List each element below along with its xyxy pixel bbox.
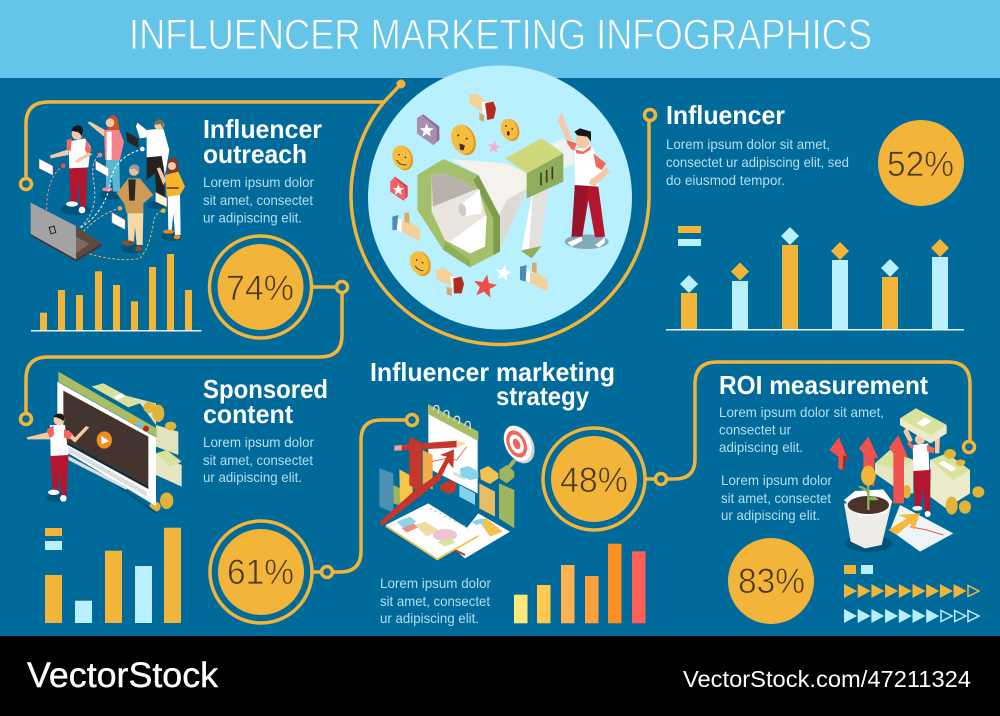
money and coins [92,383,182,512]
title: INFLUENCER MARKETING INFOGRAPHICS [129,11,872,59]
bar chart [45,528,181,623]
text block: Lorem ipsum dolor sit amet, [719,404,884,420]
text block: sit amet, consectet [380,593,490,609]
rating badges [390,114,439,201]
bar chart [31,254,202,332]
text block: consectet ur adipiscing elit, sed [666,154,849,170]
red arrows [829,435,908,503]
text block: sit amet, consectet [721,490,831,506]
arrow meter: orange [844,584,979,598]
notebook [386,503,478,560]
heading: ROI measurement: ROI measurement [719,370,928,400]
laptop [31,203,102,261]
heading: strategy [370,357,615,411]
heading: influencer: Influencer [666,100,785,130]
envelopes [39,159,167,229]
text block: ur adipiscing elit. [203,469,302,485]
percentage badge 61%: 61% [227,553,294,592]
percentage badge 74% [210,236,312,338]
text block: sit amet, consectet [203,452,313,468]
header band [0,0,1000,78]
text block [721,472,832,523]
chart legend [678,226,701,246]
text block: Lorem ipsum dolor [203,434,314,450]
megaphone [417,138,573,267]
text block [380,575,491,626]
footer watermark band: VectorStock [27,656,219,695]
man red and white [50,125,93,213]
chart legend [844,565,873,574]
text block: sit amet, consectet [203,192,313,208]
text block [203,434,314,485]
text block: Lorem ipsum dolor [380,575,491,591]
illustration: people and laptop [31,115,185,261]
footer watermark band: VectorStock.com/47211324 [683,666,971,692]
heading: strategy: strategy [496,381,589,411]
text block: ur adipiscing elit. [203,210,302,226]
bar chart [514,544,646,623]
percentage badge 52%: 52% [887,145,954,184]
text block [203,174,314,226]
chart legend [45,528,62,550]
connector lines [20,80,974,578]
panel: central megaphone illustration [389,93,610,299]
heading: influencer outreach [203,114,322,169]
money stacks [875,449,984,515]
panel: ROI measurement [719,370,984,624]
footer watermark band [0,636,1000,716]
percentage badge 48% [543,428,645,530]
paper sheet [452,513,510,558]
yellow arrow [888,513,920,535]
central light circle [368,66,632,330]
panel: influencer [666,100,964,330]
bar chart with diamonds [666,227,964,330]
panel: influencer outreach [31,114,322,338]
woman pink [87,115,124,192]
calendar [428,404,478,493]
target [498,421,540,468]
percentage badge 83% [728,538,814,624]
3d bars [379,437,514,528]
text block: adipiscing elit. [719,439,803,455]
person lifting money [900,408,947,517]
percentage badge 61% [210,521,312,623]
panel: influencer marketing strategy [370,357,646,626]
illustration: plant, money and arrows [829,408,984,552]
heading: sponsored content: Sponsored [203,374,328,404]
person [557,112,610,249]
heading: influencer outreach: outreach [203,139,307,169]
heading: influencer outreach: Influencer [203,114,322,144]
percentage badge 83%: 83% [738,562,805,601]
pot with plant [844,466,892,552]
text block [666,136,849,188]
percentage badge 52% [878,120,964,206]
text block: consectet ur [719,422,791,438]
text block: do eiusmod tempor. [666,172,785,188]
percentage badge 74%: 74% [226,269,294,308]
percentage badge 48%: 48% [560,461,628,500]
text block: ur adipiscing elit. [380,610,479,626]
text block [719,404,884,455]
heading: sponsored content [203,374,328,429]
arrow meter: light blue [844,609,979,623]
heading: strategy: Influencer marketing [370,357,615,387]
heading: sponsored content: content [203,399,293,429]
illustration: charts, calendar and target [379,404,540,560]
panel: sponsored content [27,372,328,623]
illustration: video window with money [27,372,182,513]
connected hexagons [440,460,515,494]
dashed links [47,147,166,260]
text block: Lorem ipsum dolor sit amet, [666,136,830,152]
stars [472,140,513,299]
old man tan [117,164,153,252]
pencil [394,441,467,451]
text block: ur adipiscing elit. [721,507,820,523]
emoji icons [389,116,522,279]
text block: Lorem ipsum dolor [721,472,832,488]
woman yellow [157,157,185,239]
man white shirt [126,119,169,204]
thumb icons [392,93,548,296]
rising arrow [380,449,454,526]
text block: Lorem ipsum dolor [203,174,314,190]
person presenting [27,414,89,502]
graph paper [890,505,953,552]
